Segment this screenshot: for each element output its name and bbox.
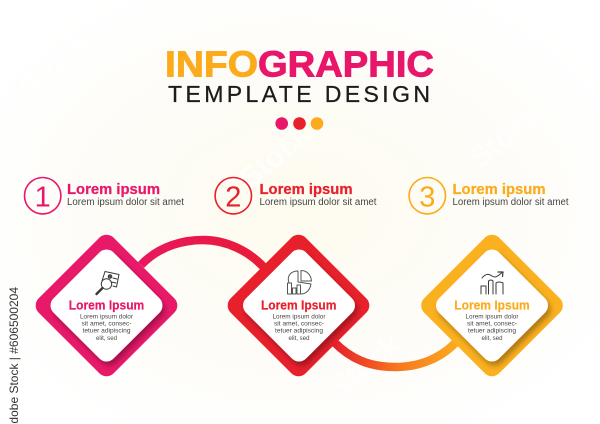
icon: magnifier over document xyxy=(96,272,119,294)
watermark: Stock xyxy=(323,327,407,405)
watermark: Stock xyxy=(233,117,317,195)
number badge 1 xyxy=(24,178,61,214)
number badge 1: 1 xyxy=(35,181,51,213)
card 2 text: elit, sed xyxy=(288,335,310,342)
card 1 text: Lorem ipsum dolor xyxy=(80,314,133,320)
card 2 diamond frame xyxy=(224,231,373,380)
watermark: Stock xyxy=(463,97,547,175)
connector arc: step 2 to step 3 xyxy=(334,340,458,367)
icon: pie chart with bars xyxy=(288,270,312,294)
title word: GRAPHIC: GRAPHIC xyxy=(258,44,434,84)
card 1 text: sit amet, consec- xyxy=(82,321,132,328)
card 1 diamond frame xyxy=(32,231,181,380)
card 2 white panel xyxy=(239,245,359,366)
title word: INFO: INFO xyxy=(165,44,258,84)
number badge 2 xyxy=(215,178,252,214)
title dots xyxy=(275,117,323,130)
card 3 text: sit amet, consec- xyxy=(467,321,517,328)
number badge 2: 2 xyxy=(225,181,241,213)
card 2 text: Lorem ipsum dolor xyxy=(272,314,326,320)
card 3 diamond frame xyxy=(417,231,567,380)
card 3 text: Lorem ipsum dolor xyxy=(466,314,518,320)
watermark: Stock xyxy=(503,347,587,424)
subtitle: TEMPLATE DESIGN xyxy=(168,81,430,107)
card 2 text xyxy=(272,314,326,342)
step 2 text: Lorem ipsum dolor sit amet xyxy=(260,197,377,208)
number badge 3 xyxy=(409,178,445,214)
card 1 text xyxy=(80,314,133,342)
icon: growth bars with arrow xyxy=(481,272,503,294)
card 2 title: Lorem Ipsum xyxy=(261,298,336,313)
step 2 heading xyxy=(215,178,377,214)
card 3 title: Lorem Ipsum xyxy=(454,298,530,313)
card 1 xyxy=(32,231,181,380)
step 2 title: Lorem ipsum xyxy=(260,181,352,198)
card 3 xyxy=(417,231,567,380)
watermark: Stock xyxy=(13,27,97,105)
card 3 text: tetuer adipiscing xyxy=(468,328,517,335)
step 3 title: Lorem ipsum xyxy=(452,181,546,198)
step 3 heading xyxy=(409,178,569,214)
card 2 xyxy=(224,231,373,380)
step 1 heading xyxy=(24,178,184,214)
card 1 white panel xyxy=(46,245,167,366)
card 3 white panel xyxy=(432,245,552,366)
number badge 3: 3 xyxy=(419,181,435,213)
card 1 text: tetuer adipiscing xyxy=(82,328,131,335)
title xyxy=(165,44,434,84)
card 3 text xyxy=(466,314,518,342)
card 2 text: tetuer adipiscing xyxy=(275,328,324,335)
card 1 text: elit, sed xyxy=(96,335,117,342)
step 1 text: Lorem ipsum dolor sit amet xyxy=(67,197,184,208)
card 2 text: sit amet, consec- xyxy=(274,321,324,328)
step 1 title: Lorem ipsum xyxy=(67,181,160,198)
connector arc: step 1 to step 2 xyxy=(141,240,268,272)
step 3 text: Lorem ipsum dolor sit amet xyxy=(452,197,569,208)
card 1 title: Lorem Ipsum xyxy=(69,298,144,313)
card 3 text: elit, sed xyxy=(482,335,503,342)
